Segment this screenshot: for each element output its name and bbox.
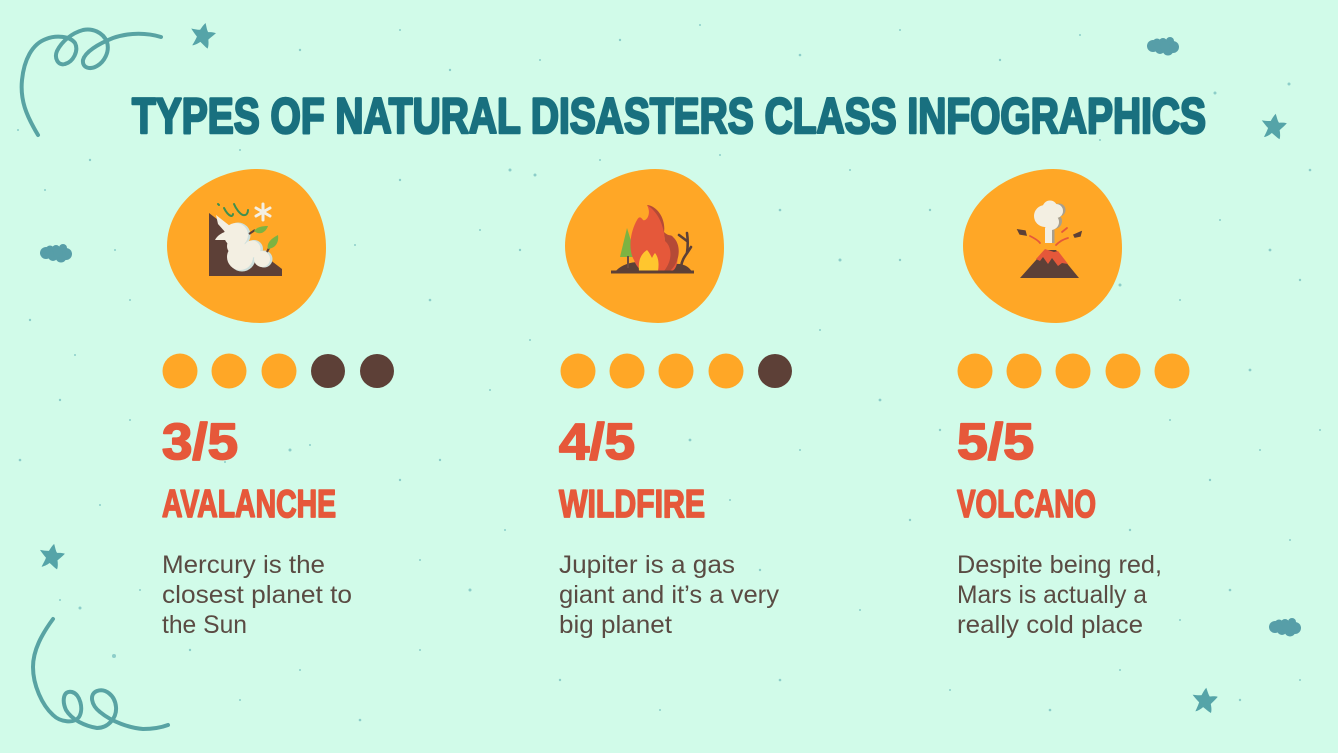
heading: avalanche: AVALANCHE (162, 483, 336, 526)
description: volcano: Despite being red, (957, 551, 1162, 579)
icon: star bottom right (1191, 686, 1219, 714)
icon: star top right (1260, 112, 1288, 140)
score: 5/5 (957, 413, 1034, 470)
panel: volcano (957, 169, 1190, 639)
description: volcano: Mars is actually a (957, 581, 1147, 609)
description: wildfire: Jupiter is a gas (559, 551, 735, 579)
description: wildfire (559, 551, 779, 639)
panel: wildfire (559, 169, 792, 639)
description: volcano (957, 551, 1162, 639)
description: volcano: really cold place (957, 611, 1143, 639)
heading: volcano: VOLCANO (957, 483, 1096, 526)
score: 4/5 (559, 413, 635, 470)
icon: cloud bottom right (1269, 618, 1301, 636)
description: avalanche (162, 551, 352, 639)
icon: cloud top right (1147, 37, 1179, 56)
icon: star left (37, 542, 66, 570)
heading: wildfire: WILDFIRE (559, 483, 705, 526)
description: avalanche: Mercury is the (162, 551, 325, 579)
panel: avalanche (162, 169, 394, 639)
icon badge: wildfire (565, 169, 724, 323)
description: wildfire: giant and it’s a very (559, 581, 779, 609)
rating dots: 3 of 5 (162, 354, 394, 388)
icon: cloud left (40, 244, 72, 262)
rating dots: 5 of 5 (958, 354, 1190, 388)
decorative swirl: top left (22, 30, 161, 135)
score: 3/5 (162, 413, 238, 470)
description: avalanche: closest planet to (162, 581, 352, 609)
icon badge: volcano (963, 169, 1122, 323)
icon badge: avalanche (167, 169, 326, 323)
description: wildfire: big planet (559, 611, 672, 639)
decorative swirl: bottom left (33, 619, 168, 729)
description: avalanche: the Sun (162, 611, 247, 639)
rating dots: 4 of 5 (560, 354, 792, 388)
icon: star top (188, 20, 218, 50)
